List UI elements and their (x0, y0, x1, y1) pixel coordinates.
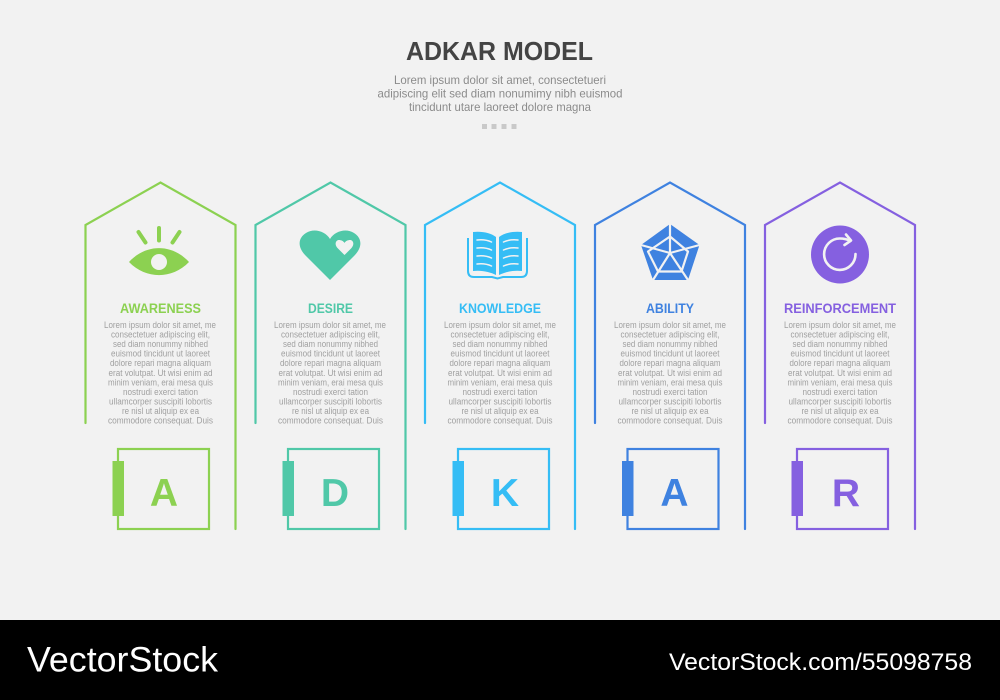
panel outline (256, 182, 406, 529)
title: ADKAR MODEL (406, 36, 593, 66)
footer bar (0, 620, 1000, 700)
body text: minim veniam, erai mesa quis (788, 377, 893, 387)
heading: DESIRE (308, 301, 353, 316)
body text: consectetuer adipiscing elit, (281, 330, 380, 340)
panel outline (765, 182, 915, 529)
body text: minim veniam, erai mesa quis (278, 377, 383, 387)
icon: eye (129, 228, 189, 275)
body text: erat volutpat. Ut wisi enim ad (448, 368, 552, 378)
body text: dolore repari magna aliquam (110, 358, 211, 368)
body text: nostrudi exerci tation (123, 387, 198, 397)
body text: Lorem ipsum dolor sit amet, me (784, 320, 896, 330)
body text: Lorem ipsum dolor sit amet, me (274, 320, 386, 330)
body text: euismod tincidunt ut laoreet (281, 349, 380, 359)
body text: erat volutpat. Ut wisi enim ad (278, 368, 382, 378)
subtitle text (378, 73, 622, 114)
footer brand: VectorStock (27, 640, 219, 680)
body text (274, 320, 386, 426)
title dots (482, 124, 516, 129)
panel: reinforcement (765, 182, 915, 529)
body text: commodore consequat. Duis (108, 416, 213, 426)
body text: commodore consequat. Duis (278, 416, 383, 426)
icon: heart (300, 231, 360, 280)
body text: nostrudi exerci tation (802, 387, 878, 397)
body text: commodore consequat. Duis (448, 416, 553, 426)
body text: re nisl ut aliquip ex ea (462, 406, 538, 416)
panel outline (595, 182, 745, 529)
body text: Lorem ipsum dolor sit amet, me (444, 320, 556, 330)
body text: Lorem ipsum dolor sit amet, me (614, 320, 726, 330)
body text: commodore consequat. Duis (788, 416, 893, 426)
body text: nostrudi exerci tation (632, 387, 708, 397)
body text: re nisl ut aliquip ex ea (292, 406, 369, 416)
body text (784, 320, 896, 426)
body text (444, 320, 556, 426)
body text: ullamcorper suscipiti lobortis (109, 396, 212, 406)
footer url: VectorStock.com/55098758 (669, 649, 972, 676)
body text: dolore repari magna aliquam (790, 358, 890, 368)
body text (104, 320, 216, 426)
body text: ullamcorper suscipiti lobortis (448, 396, 552, 406)
subtitle text: adipiscing elit sed diam nonumimy nibh euismod (378, 86, 622, 100)
letter box A (112, 449, 209, 529)
body text: re nisl ut aliquip ex ea (122, 406, 199, 416)
letter box D (282, 449, 379, 529)
body text: ullamcorper suscipiti lobortis (788, 396, 892, 406)
body text: euismod tincidunt ut laoreet (790, 349, 890, 359)
letter box R: R (832, 472, 860, 515)
body text: minim veniam, erai mesa quis (618, 377, 723, 387)
icon: pentagon radar (641, 224, 700, 280)
icon: open book (468, 232, 527, 278)
body text: nostrudi exerci tation (462, 387, 538, 397)
body text: euismod tincidunt ut laoreet (620, 349, 720, 359)
body text: Lorem ipsum dolor sit amet, me (104, 320, 216, 330)
letter box R (792, 449, 888, 529)
body text: re nisl ut aliquip ex ea (632, 406, 708, 416)
body text: euismod tincidunt ut laoreet (450, 349, 550, 359)
letter box A: A (150, 472, 178, 515)
body text: sed diam nonummy nibhed (792, 339, 888, 349)
body text: sed diam nonummy nibhed (283, 339, 378, 349)
body text: ullamcorper suscipiti lobortis (618, 396, 722, 406)
letter box K: K (491, 472, 519, 515)
body text: commodore consequat. Duis (618, 416, 723, 426)
letter box A (622, 449, 718, 529)
body text: nostrudi exerci tation (293, 387, 368, 397)
heading: REINFORCEMENT (784, 301, 897, 316)
body text: erat volutpat. Ut wisi enim ad (788, 368, 892, 378)
panel: knowledge (425, 182, 575, 529)
panel: awareness (86, 182, 236, 529)
letter box A: A (660, 472, 689, 515)
body text: consectetuer adipiscing elit, (450, 330, 550, 340)
body text (614, 320, 726, 426)
body text: dolore repari magna aliquam (450, 358, 550, 368)
body text: consectetuer adipiscing elit, (620, 330, 720, 340)
body text: ullamcorper suscipiti lobortis (279, 396, 382, 406)
subtitle text: tincidunt utare laoreet dolore magna (409, 100, 591, 114)
body text: erat volutpat. Ut wisi enim ad (618, 368, 722, 378)
body text: erat volutpat. Ut wisi enim ad (108, 368, 212, 378)
body text: euismod tincidunt ut laoreet (111, 349, 210, 359)
panel: ability (595, 182, 745, 529)
subtitle text: Lorem ipsum dolor sit amet, consectetueri (394, 73, 606, 87)
body text: consectetuer adipiscing elit, (790, 330, 890, 340)
body text: sed diam nonummy nibhed (622, 339, 718, 349)
body text: re nisl ut aliquip ex ea (802, 406, 878, 416)
panel outline (86, 182, 236, 529)
body text: sed diam nonummy nibhed (113, 339, 208, 349)
letter box D: D (321, 472, 349, 515)
panel: desire (256, 182, 406, 529)
icon: refresh circle (811, 226, 869, 284)
body text: dolore repari magna aliquam (620, 358, 720, 368)
body text: minim veniam, erai mesa quis (108, 377, 213, 387)
heading: ABILITY (646, 301, 694, 316)
body text: consectetuer adipiscing elit, (111, 330, 210, 340)
panel outline (425, 182, 575, 529)
letter box K (452, 449, 549, 529)
body text: sed diam nonummy nibhed (452, 339, 548, 349)
body text: dolore repari magna aliquam (280, 358, 381, 368)
heading: AWARENESS (120, 301, 201, 316)
body text: minim veniam, erai mesa quis (448, 377, 553, 387)
heading: KNOWLEDGE (459, 301, 541, 316)
